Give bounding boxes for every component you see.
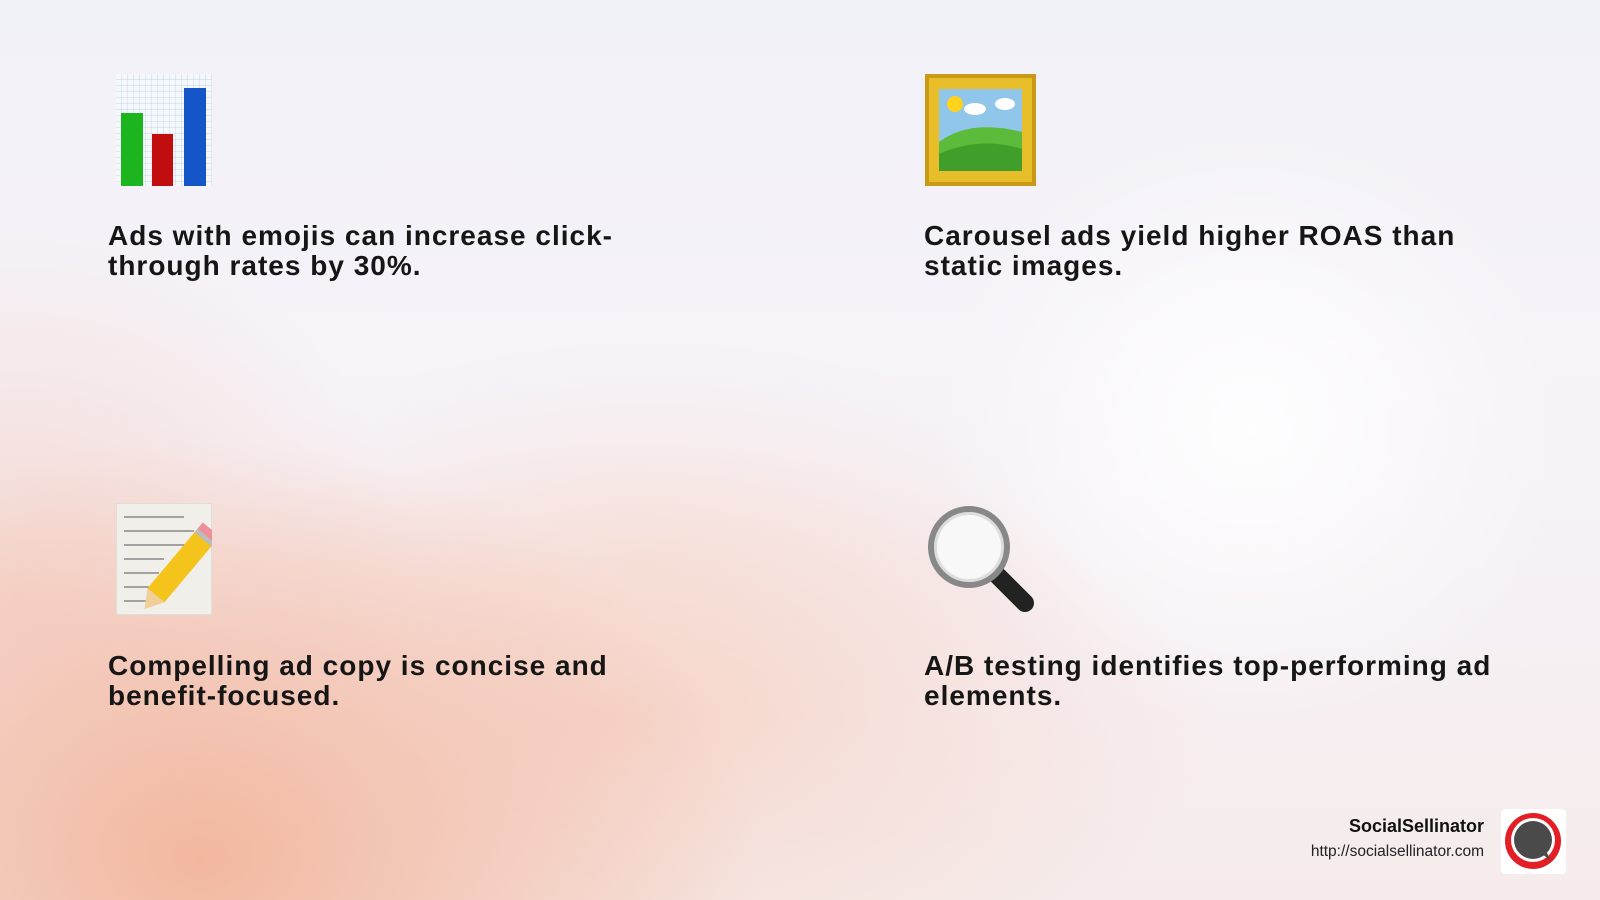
logo (1501, 809, 1566, 874)
icon: magnifying glass (928, 506, 1034, 612)
text: ad copy: Compelling ad copy is concise and benefit-focused. (108, 650, 608, 711)
icon: memo and pencil (116, 503, 212, 615)
brand footer: http://socialsellinator.com (1311, 843, 1484, 860)
text: carousel: Carousel ads yield higher ROAS than static images. (924, 220, 1455, 281)
text: A/B testing: A/B testing identifies top-performing ad elements. (924, 650, 1491, 711)
icon: bar chart (116, 74, 212, 186)
brand footer (1311, 816, 1484, 860)
icon: framed picture (925, 74, 1036, 186)
text: emojis: Ads with emojis can increase click-through rates by 30%. (108, 220, 613, 281)
brand footer: SocialSellinator (1349, 816, 1484, 836)
